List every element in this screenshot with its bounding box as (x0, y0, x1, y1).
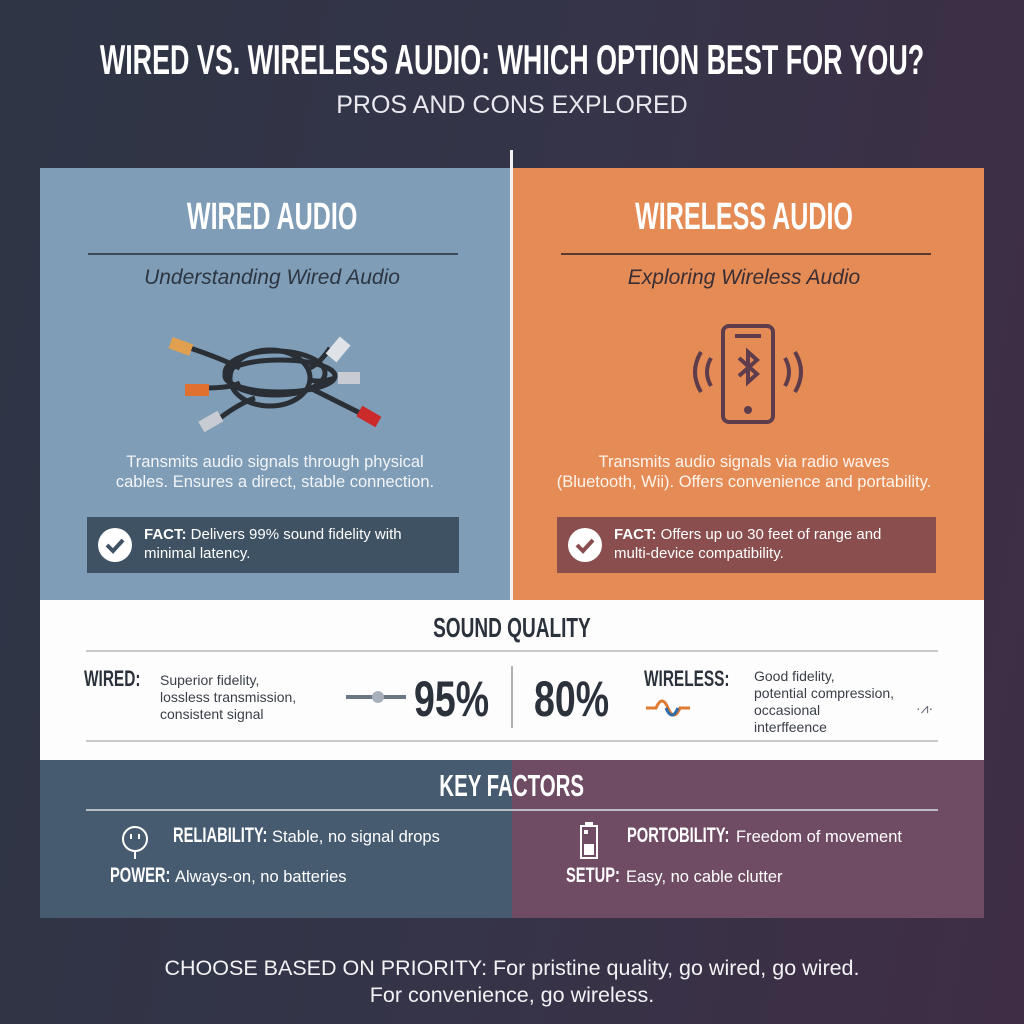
footer conclusion (164, 956, 860, 1007)
fact box wireless: multi-device compatibility. (614, 545, 784, 562)
icon: check (98, 528, 132, 562)
icon: cables (168, 336, 382, 432)
icon: plug (122, 826, 148, 859)
wired factors: Stable, no signal drops (272, 828, 440, 846)
wireless factors: PORTOBILITY: (627, 824, 729, 847)
heading sound quality: SOUND QUALITY (433, 612, 591, 643)
fact box wired: FACT: Delivers 99% sound fidelity with (144, 526, 402, 543)
description wired: Transmits audio signals through physical (126, 453, 424, 471)
wireless quality: 80% (534, 671, 609, 727)
footer conclusion: CHOOSE BASED ON PRIORITY: For pristine quality, go wired, go wired. (164, 956, 860, 980)
wired quality: 95% (414, 671, 489, 727)
description wireless: Transmits audio signals via radio waves (598, 453, 890, 471)
footer conclusion: For convenience, go wireless. (370, 983, 654, 1007)
wired quality: WIRED: (84, 666, 140, 691)
fact box wired: minimal latency. (144, 545, 250, 562)
description wireless: (Bluetooth, Wii). Offers convenience and portability. (557, 473, 931, 491)
wireless quality: ·⩘· (916, 700, 933, 716)
wired quality: Superior fidelity, (160, 672, 259, 688)
panel: wired (40, 168, 510, 600)
wired quality (84, 666, 489, 727)
heading: wired audio: WIRED AUDIO (187, 196, 357, 238)
fact box wired (87, 517, 459, 573)
subtitle: PROS AND CONS EXPLORED (336, 91, 688, 119)
wired factors (110, 824, 440, 887)
wired factors: RELIABILITY: (173, 824, 267, 847)
icon: battery (580, 822, 598, 859)
description wired: cables. Ensures a direct, stable connection. (116, 473, 434, 491)
wired quality: consistent signal (160, 706, 264, 722)
wired quality: lossless transmission, (160, 689, 296, 705)
panel: wireless (513, 168, 984, 600)
subheading: Understanding Wired Audio (144, 266, 400, 289)
wireless factors: SETUP: (566, 864, 620, 887)
wireless quality: occasional (754, 702, 820, 718)
description wired (116, 453, 434, 491)
fact box wireless: FACT: Offers up uo 30 feet of range and (614, 526, 881, 543)
wireless quality: WIRELESS: (644, 666, 730, 691)
heading: wireless audio: WIRELESS AUDIO (635, 196, 853, 238)
wireless factors: Easy, no cable clutter (626, 868, 783, 886)
panel: sound quality (40, 600, 984, 760)
wireless quality: interffeence (754, 719, 827, 735)
icon: phone bluetooth (693, 324, 803, 424)
wireless factors: Freedom of movement (736, 828, 902, 846)
wireless quality: Good fidelity, (754, 668, 835, 684)
heading key factors: KEY FACTORS (440, 768, 584, 803)
wireless factors (566, 822, 902, 887)
wired factors: POWER: (110, 864, 170, 887)
wireless quality (534, 666, 933, 735)
divider line top (510, 150, 513, 600)
panel: key factors (40, 760, 984, 918)
wired factors: Always-on, no batteries (175, 868, 347, 886)
subheading: Exploring Wireless Audio (628, 266, 860, 289)
icon: check (568, 528, 602, 562)
wireless quality: potential compression, (754, 685, 894, 701)
fact box wireless (557, 517, 936, 573)
title: WIRED VS. WIRELESS AUDIO: WHICH OPTION BEST FOR YOU? (100, 36, 924, 83)
description wireless (557, 453, 931, 491)
